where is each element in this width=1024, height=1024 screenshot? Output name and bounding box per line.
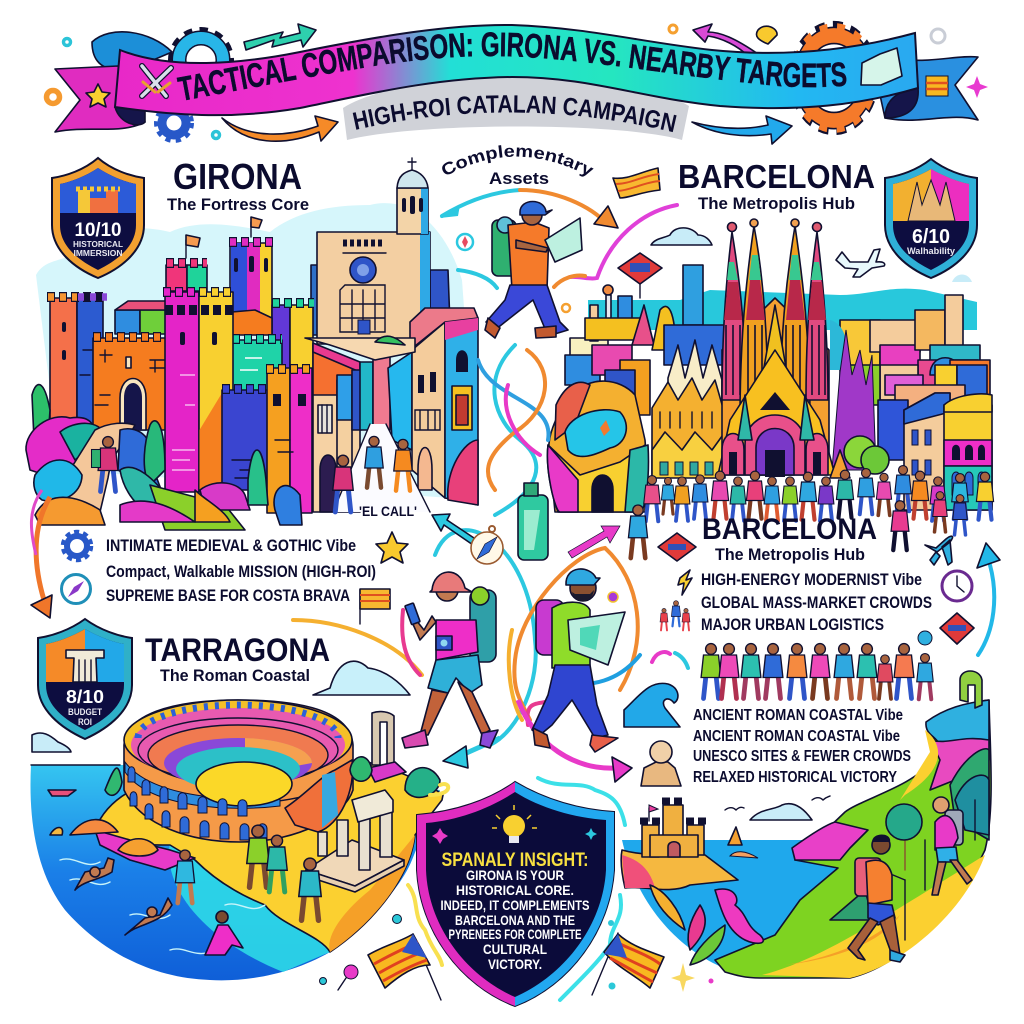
shield: Tarragona score: ROI: [78, 717, 92, 727]
houses behind wall: [115, 301, 166, 334]
icon: catalan flag in tail: [926, 76, 948, 96]
icon: cloud: [651, 228, 712, 245]
icon: purple dot: [608, 592, 618, 602]
people on Tarragona beach: [75, 825, 321, 955]
street ground: [333, 424, 430, 512]
arrow: green zigzag: [244, 24, 316, 50]
compass: [471, 526, 503, 564]
icon: plane: [925, 536, 953, 565]
icon: blue dot: [918, 631, 932, 645]
icon: dark blue gear: [157, 106, 191, 140]
icon: ionic column: [66, 650, 104, 682]
arch ruin: [960, 671, 982, 708]
panel: Roman coastal bullet list: ANCIENT ROMAN COASTAL Vibe: [693, 707, 903, 724]
banner tail left: [55, 66, 145, 132]
shield: Barcelona score: Walhability: [907, 246, 956, 257]
icon: sparkle magenta: [432, 828, 448, 844]
icon: map on banner: [861, 48, 902, 85]
arrow: cyan to Tarragona: [443, 738, 500, 768]
panel: Girona bullet list: [62, 532, 408, 624]
icon: orange ring: [669, 25, 677, 33]
water bottle: [518, 483, 548, 560]
icon: catalan flag right: [592, 933, 664, 995]
shield: Tarragona score: 8/10: [66, 687, 104, 707]
icon: blue gear behind banner: [172, 31, 230, 89]
sailboat: [728, 827, 758, 858]
panel: Roman coastal bullet list: RELAXED HISTORICAL VICTORY: [693, 769, 897, 786]
boat: [48, 790, 76, 796]
panel: Barcelona bullet list: HIGH-ENERGY MODERNIST Vibe: [701, 571, 922, 589]
arrow: cyan to Girona: [440, 190, 520, 218]
icon: sparkle cyan: [585, 828, 597, 840]
tower: blue magenta yellow: [229, 217, 273, 321]
trees: [830, 436, 889, 478]
arrows between panels: [31, 190, 1000, 782]
squiggles and flags around shield: [320, 778, 714, 1000]
title banner: [54, 24, 979, 133]
icon: airplane: [836, 249, 885, 277]
icon: light bulb: [492, 805, 537, 843]
panel: Barcelona city illustration: [547, 219, 994, 558]
icon: banner star: [86, 84, 110, 107]
panel: Barcelona bullet list: BARCELONA: [702, 513, 877, 546]
icon: yellow blob: [756, 26, 777, 44]
icon: flag bullet: [360, 589, 390, 624]
panel: Roman coastal bullet list: ANCIENT ROMAN COASTAL Vibe: [693, 728, 900, 745]
panel: Roman coastal bullet list: UNESCO SITES & FEWER CROWDS: [693, 748, 911, 765]
shield: Girona score: IMMERSION: [74, 248, 122, 258]
arrow: cyan short above hiker: [458, 270, 497, 288]
panel: Roman coastal bullet list: [608, 592, 911, 786]
heading: Girona: [167, 156, 309, 214]
heading: Barcelona top: BARCELONA: [678, 158, 875, 195]
coastal cliff: [792, 822, 868, 860]
arrow: orange swoosh: [222, 116, 338, 141]
panel: Barcelona bullet list: The Metropolis Hub: [715, 545, 865, 564]
castle on island: [640, 801, 706, 857]
central connecting ribbons: [293, 345, 640, 745]
shield: Girona score: HISTORICAL: [73, 239, 123, 249]
man traveller: [532, 569, 625, 752]
hiker with orange shirt: [848, 834, 905, 962]
arrow: blue swoosh: [692, 116, 792, 144]
icon: catalan flag left: [368, 934, 441, 1000]
label: El Call: 'EL CALL': [359, 504, 417, 519]
sky cloud backdrop: [36, 203, 478, 500]
panel: Costa Brava scene: [621, 671, 991, 978]
icon: castle badge: [76, 189, 120, 213]
subtitle ribbon: HIGH-ROI CATALAN CAMPAIGN: [352, 95, 677, 132]
tropical plants: [650, 885, 763, 965]
Park Guell building: [547, 381, 648, 512]
insight body text: INDEED, IT COMPLEMENTS: [440, 897, 590, 913]
yellow path: [762, 855, 985, 978]
swimmers: [75, 858, 114, 890]
ruined columns: [306, 712, 440, 892]
heading: Barcelona top: The Metropolis Hub: [698, 194, 855, 213]
birds: [725, 796, 830, 810]
tower: left orange and blue: [47, 297, 107, 426]
wall: green: [232, 339, 282, 395]
panel: Girona bullet list: INTIMATE MEDIEVAL & GOTHIC Vibe: [106, 536, 356, 555]
icon: star bullet: [376, 532, 408, 563]
icon: metro sign: [618, 253, 662, 298]
squiggle: yellow left: [408, 784, 448, 965]
heading: Barcelona top: [678, 158, 875, 213]
icon: crowd group: [660, 601, 690, 630]
rocks and path: [26, 385, 302, 530]
arrow: magenta to Barcelona: [568, 526, 620, 558]
panel: Barcelona bullet list: GLOBAL MASS-MARKET CROWDS: [701, 594, 932, 612]
city blocks: [565, 265, 990, 470]
small cloud: [750, 804, 812, 820]
arrow: magenta to Roman list: [518, 700, 632, 782]
icons around Barcelona sky: [562, 168, 972, 312]
icon: wave: [624, 683, 680, 727]
heading: Girona: The Fortress Core: [167, 195, 309, 214]
backpacker with map: [485, 202, 582, 338]
sea: [30, 765, 440, 980]
heading: Tarragona: The Roman Coastal: [160, 666, 310, 685]
icon: swoosh behind banner: [92, 32, 172, 72]
insight body text: BARCELONA AND THE: [455, 912, 575, 928]
arrow: cyan up to Barcelona: [977, 543, 1000, 655]
tower: orange and magenta: [266, 368, 312, 513]
wall: orange gate wall: [93, 337, 167, 430]
hiker with pink shirt: [925, 797, 972, 895]
cliffs: [95, 830, 195, 870]
banner tail right: [880, 57, 978, 120]
bay water: [622, 840, 880, 978]
panel: Girona bullet list: Compact, Walkable MISSION (HIGH-ROI): [106, 562, 376, 581]
tower: purple yellow: [232, 303, 314, 375]
colosseum: [124, 700, 353, 842]
arrow: orange short: [554, 275, 585, 287]
icon: clock: [942, 571, 972, 601]
insight body text: [440, 867, 590, 972]
tower: upper pink and green: [166, 235, 207, 291]
wall: blue: [222, 389, 268, 490]
panel: Girona fortress illustration: [26, 158, 478, 530]
arrow: cyan to El Call: [432, 514, 480, 547]
heading: Tarragona: TARRAGONA: [145, 632, 330, 668]
insight shield: [417, 782, 614, 1006]
arrow: magenta to metro: [570, 205, 677, 279]
arches lower row: [130, 792, 267, 840]
hiker on path: [92, 437, 118, 492]
label: complementary assets: Complementary: [442, 145, 594, 177]
icon: teal rings: [64, 38, 220, 138]
cathedral: [311, 158, 450, 344]
heading: Tarragona: [145, 632, 330, 685]
Eixample houses: [904, 393, 992, 510]
icon: metro diamond: [658, 533, 696, 561]
foreground land: [715, 700, 991, 978]
header decorations: [46, 24, 988, 144]
icon: basilica badge: [908, 180, 955, 221]
icon: cyan squiggle: [675, 653, 688, 668]
arches upper row: [128, 767, 247, 816]
insight body text: GIRONA IS YOUR: [466, 867, 564, 883]
shield: Barcelona score: 6/10: [912, 226, 950, 248]
tower: big magenta and yellow: [163, 292, 234, 492]
insight body text: HISTORICAL CORE.: [456, 882, 574, 898]
trees: [830, 804, 922, 920]
icon: ring: [562, 304, 570, 312]
icon: magenta sparkle: [966, 76, 988, 98]
panel: Barcelona bullet list: MAJOR URBAN LOGISTICS: [701, 616, 884, 634]
distant headland: [900, 671, 989, 840]
row of tourists: [701, 644, 933, 699]
arrow: orange to Barcelona: [520, 190, 618, 228]
squiggle: cyan right: [538, 778, 625, 1000]
icon: orange gear right: [793, 25, 875, 131]
insight body text: VICTORY.: [488, 956, 542, 972]
icon: magenta squiggle: [652, 652, 670, 662]
icon: decorative dots: [320, 914, 714, 992]
Sagrada Familia basilica: [718, 219, 835, 477]
icon: small cloud: [952, 274, 972, 282]
heading: Girona: GIRONA: [173, 156, 302, 197]
banner body: [115, 25, 918, 115]
insight heading: SPANALY INSIGHT:: [442, 850, 588, 871]
spires: [722, 219, 828, 420]
panel: Barcelona bullet list: [658, 513, 974, 645]
label: complementary assets: Assets: [489, 169, 549, 188]
waves: [60, 859, 265, 954]
icon: catalan flag: [613, 168, 660, 198]
skyline backdrop: [588, 289, 977, 330]
woman traveller: [402, 572, 498, 748]
shield: Girona score: [52, 158, 144, 278]
icon: Roman bust: [641, 741, 681, 786]
old town street buildings: [305, 308, 478, 512]
icon: compass bullet: [62, 574, 90, 604]
crowd: [628, 466, 994, 558]
icon: lightning: [678, 570, 692, 595]
arrow: magenta back arrow: [693, 24, 758, 56]
shield: Tarragona score: [38, 619, 132, 739]
icon: grey ring: [931, 29, 945, 43]
icon: crossed swords: [142, 66, 171, 96]
land: [95, 760, 443, 952]
shield: Girona score: 10/10: [74, 220, 122, 241]
icon: metro red sign: [940, 613, 974, 644]
compass small: [457, 234, 473, 250]
title banner: TACTICAL COMPARISON: GIRONA VS. NEARBY TARGETS: [176, 32, 846, 100]
foreground island: [621, 850, 738, 890]
people in El Call: [333, 436, 412, 512]
shield: Tarragona score: BUDGET: [68, 707, 102, 717]
icon: small orange cog: [46, 90, 60, 104]
icon: clouds near Tarragona: [32, 661, 410, 752]
insight body text: PYRENEES FOR COMPLETE: [448, 926, 582, 942]
insight body text: CULTURAL: [483, 941, 547, 957]
panel: Tarragona coastal scene: [30, 760, 443, 980]
arrow: orange down to Tarragona: [31, 490, 52, 618]
icon: gear bullet: [63, 532, 91, 560]
panel: Girona bullet list: SUPREME BASE FOR COSTA BRAVA: [106, 586, 350, 605]
shield: Barcelona score: [885, 159, 977, 278]
Modernist blocks left of basilica: [652, 340, 725, 478]
